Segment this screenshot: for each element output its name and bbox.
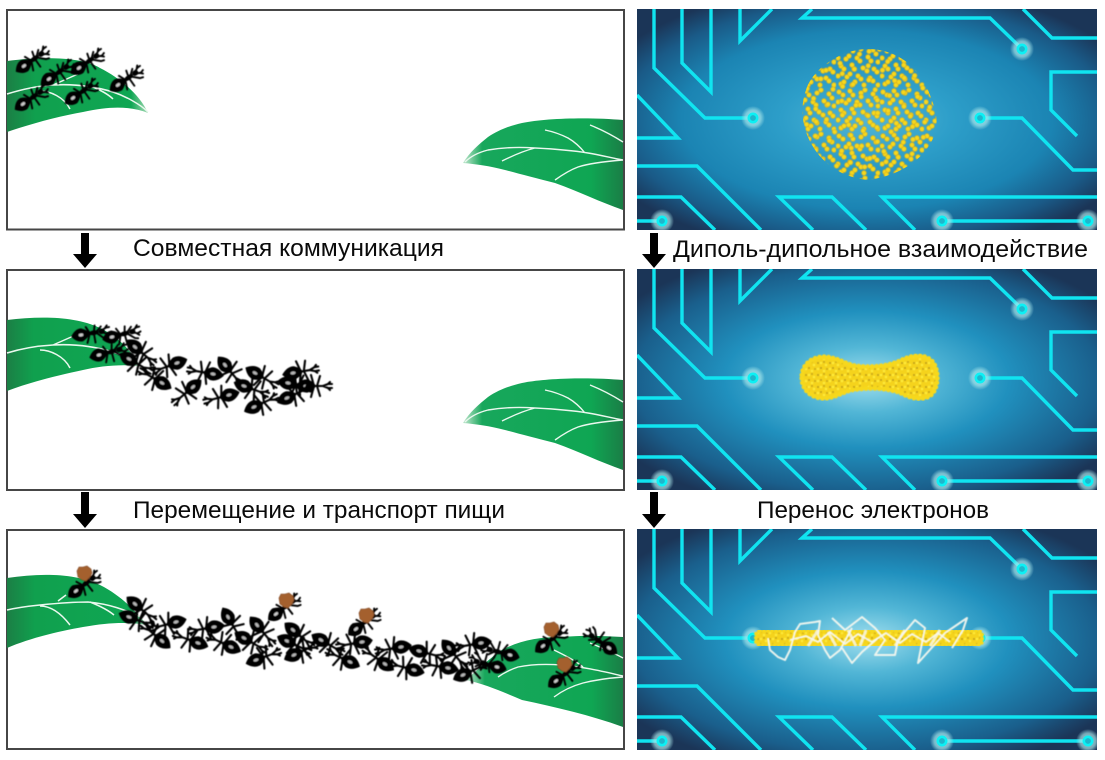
gold nanoparticle cluster <box>802 49 937 180</box>
ants group <box>11 44 147 118</box>
right leaf <box>463 378 623 470</box>
left leaf <box>7 58 148 132</box>
arrow: left step 2 <box>73 492 97 528</box>
circuit board background <box>637 529 1100 753</box>
right leaf <box>466 636 623 727</box>
arrow: right step 2 <box>642 492 666 528</box>
ant chain <box>70 323 332 422</box>
label: cooperative communication: Совместная коммуникация <box>133 235 444 262</box>
nanowire <box>756 631 982 645</box>
panel: ants on leaf, start <box>7 10 624 230</box>
panel: circuit with elongated particle cluster <box>637 269 1100 493</box>
dumbbell particle cluster <box>802 356 937 399</box>
right leaf <box>463 118 623 210</box>
circuit board background <box>637 9 1100 233</box>
panel: circuit with spherical particle cluster <box>637 9 1100 233</box>
left leaf <box>7 575 147 648</box>
left leaf <box>7 318 140 391</box>
ants carrying food <box>64 566 585 695</box>
panel: ants forming a chain <box>7 270 624 490</box>
label: electron transfer: Перенос электронов <box>757 497 989 524</box>
ant chain <box>115 589 623 690</box>
lightning arcs <box>768 617 967 663</box>
arrow: right step 1 <box>642 233 666 268</box>
circuit board background <box>637 269 1100 493</box>
arrow: left step 1 <box>73 233 97 268</box>
label: movement and food transport: Перемещение и транспорт пищи <box>133 497 505 524</box>
label: dipole interaction: Диполь-дипольное взаимодействие <box>673 236 1088 263</box>
panel: circuit with nanowire and electron flow <box>637 529 1100 753</box>
panel: ant bridge carrying food <box>7 530 624 749</box>
